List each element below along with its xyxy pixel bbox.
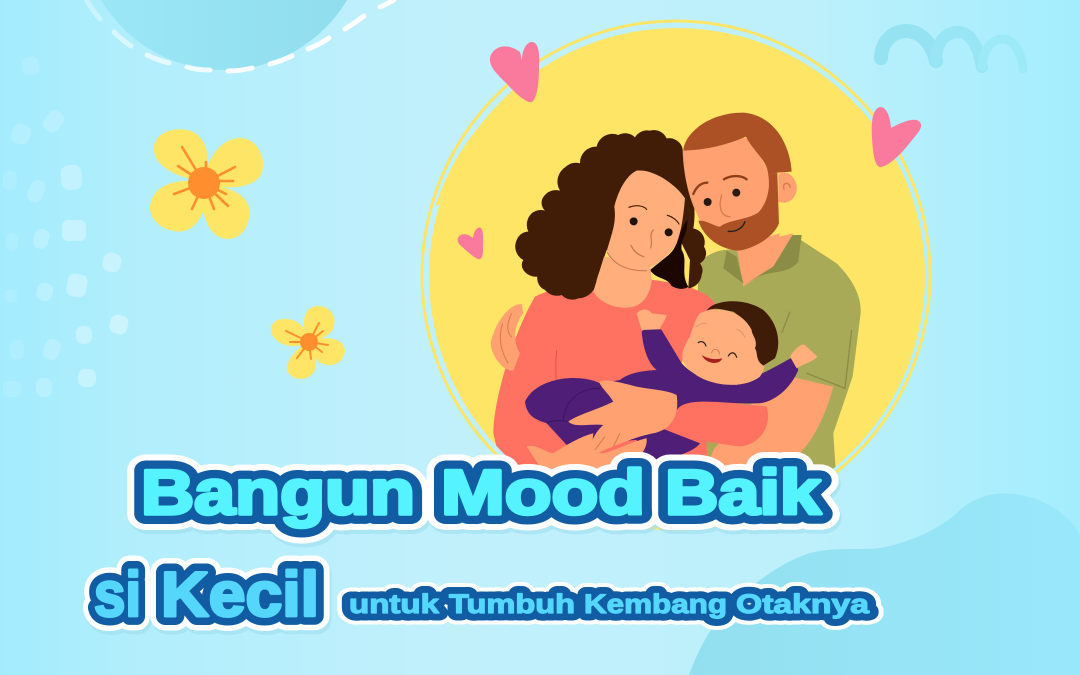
man: neck [737,233,793,287]
subtitle: untuk Tumbuh Kembang Otaknya: Otaknya [736,589,870,619]
woman: sweater fold [556,350,557,390]
title: Bangun Mood Baik: Mood [443,462,647,532]
title: Bangun Mood Baik: Baik [665,458,822,528]
title: si Kecil [94,560,321,634]
heart: small left [458,227,483,259]
title: si Kecil: Kecil [161,560,319,630]
man: hair [683,113,792,175]
woman: hair [515,130,706,300]
title: Bangun Mood Baik: Bangun [141,458,415,528]
heart: right [872,107,921,167]
family illustration [490,112,861,470]
woman: sweater [493,280,768,465]
small flower [271,306,345,379]
title: Bangun Mood Baik: Baik [667,462,824,532]
man: shirt folds [782,312,852,388]
baby: hair [707,301,778,366]
decorative dots [3,56,130,397]
large flower [150,129,263,239]
title: Bangun Mood Baik: Mood [441,458,645,528]
baby: head [682,310,765,385]
woman: dark inner hair [650,220,688,289]
heart: top left [490,42,539,102]
baby: face details [697,323,745,357]
baby: right hand [790,345,817,368]
title: si Kecil: si [96,564,143,634]
top decorative blob with dashed outline [81,0,394,71]
man: ear [778,173,797,203]
subtitle: untuk Tumbuh Kembang Otaknya: Kembang [584,589,727,619]
subtitle: untuk Tumbuh Kembang Otaknya: Kembang [584,589,727,619]
subtitle: untuk Tumbuh Kembang Otaknya: Tumbuh [449,589,575,619]
baby: left hand [637,310,667,330]
subtitle: untuk Tumbuh Kembang Otaknya: Kembang [584,589,727,619]
baby: outfit body [525,328,798,462]
woman: neck [593,257,652,308]
subtitle: untuk Tumbuh Kembang Otaknya: Otaknya [736,589,870,619]
title: si Kecil: Kecil [163,564,321,634]
title: Bangun Mood Baik [141,458,824,532]
title: Bangun Mood Baik: Mood [441,458,645,528]
subtitle: untuk Tumbuh Kembang Otaknya: Tumbuh [449,589,575,619]
subtitle: untuk Tumbuh Kembang Otaknya: untuk [349,589,440,619]
title: Bangun Mood Baik: Baik [665,458,822,528]
title: si Kecil: si [94,560,141,630]
woman: face [607,170,685,272]
title: si Kecil: si [94,560,141,630]
man: collar [723,235,802,285]
title: si Kecil: Kecil [161,560,319,630]
bottom right decorative blob [689,493,1080,675]
woman: face details [607,206,679,271]
baby: mouth [702,355,722,363]
title: Bangun Mood Baik: Bangun [141,458,415,528]
title: Bangun Mood Baik: Bangun [143,462,417,532]
subtitle: untuk Tumbuh Kembang Otaknya: Tumbuh [449,589,575,619]
baby: outfit folds [547,388,600,423]
subtitle: untuk Tumbuh Kembang Otaknya: untuk [349,589,440,619]
subtitle: untuk Tumbuh Kembang Otaknya: untuk [349,589,440,619]
title: Bangun Mood Baik: Baik [665,458,822,528]
man: neck under beard [736,234,780,252]
woman: lower hand [526,433,647,470]
subtitle: untuk Tumbuh Kembang Otaknya: Otaknya [736,589,870,619]
title: Bangun Mood Baik: Mood [441,458,645,528]
yellow circle backdrop [422,21,930,529]
man: forearm [710,378,834,466]
man: face details [693,176,790,231]
man: beard [698,173,779,251]
woman: arm holding baby [568,381,677,455]
woman: hand on man's arm [491,304,523,371]
subtitle: untuk Tumbuh Kembang Otaknya [349,589,870,619]
title: si Kecil: si [94,560,141,630]
title: Bangun Mood Baik: Bangun [141,458,415,528]
man: shirt [698,235,861,469]
logo mark [881,31,1023,69]
title: si Kecil: Kecil [161,560,319,630]
man: face [683,138,776,246]
